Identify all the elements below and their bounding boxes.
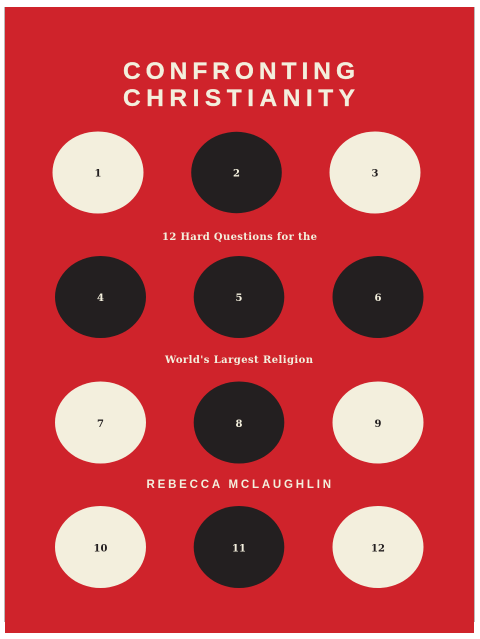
circle 12 <box>332 506 424 588</box>
subtitle line 2: World's Largest Religion <box>164 355 314 366</box>
circle 5: 5 <box>236 293 243 304</box>
circle 4 <box>55 256 146 338</box>
circle 8 <box>194 382 284 464</box>
circle 10 <box>55 506 146 588</box>
circle 4: 4 <box>97 293 104 304</box>
circle 11: 11 <box>232 544 246 554</box>
circle 9 <box>332 382 424 464</box>
subtitle line 1: 12 Hard Questions for the <box>162 232 317 243</box>
circle 3: 3 <box>372 168 379 180</box>
circle 6: 6 <box>375 293 382 304</box>
circle 9: 9 <box>375 419 382 430</box>
circle 10: 10 <box>94 544 107 554</box>
circle 7: 7 <box>97 419 104 430</box>
title: CONFRONTING <box>123 58 355 85</box>
circle 7 <box>55 382 146 464</box>
circle 1 <box>52 132 144 214</box>
circle 11 <box>194 506 284 588</box>
author: REBECCA MCLAUGHLIN <box>146 479 331 491</box>
circle 5 <box>194 256 284 338</box>
circle 3 <box>330 132 420 214</box>
circle 2 <box>191 132 282 213</box>
title <box>123 58 355 112</box>
circle 6 <box>332 256 424 338</box>
circle 2: 2 <box>233 168 240 180</box>
circle 8: 8 <box>236 419 243 430</box>
circle 1: 1 <box>95 168 101 180</box>
circle 12: 12 <box>371 544 385 554</box>
title: CHRISTIANITY <box>123 85 355 112</box>
